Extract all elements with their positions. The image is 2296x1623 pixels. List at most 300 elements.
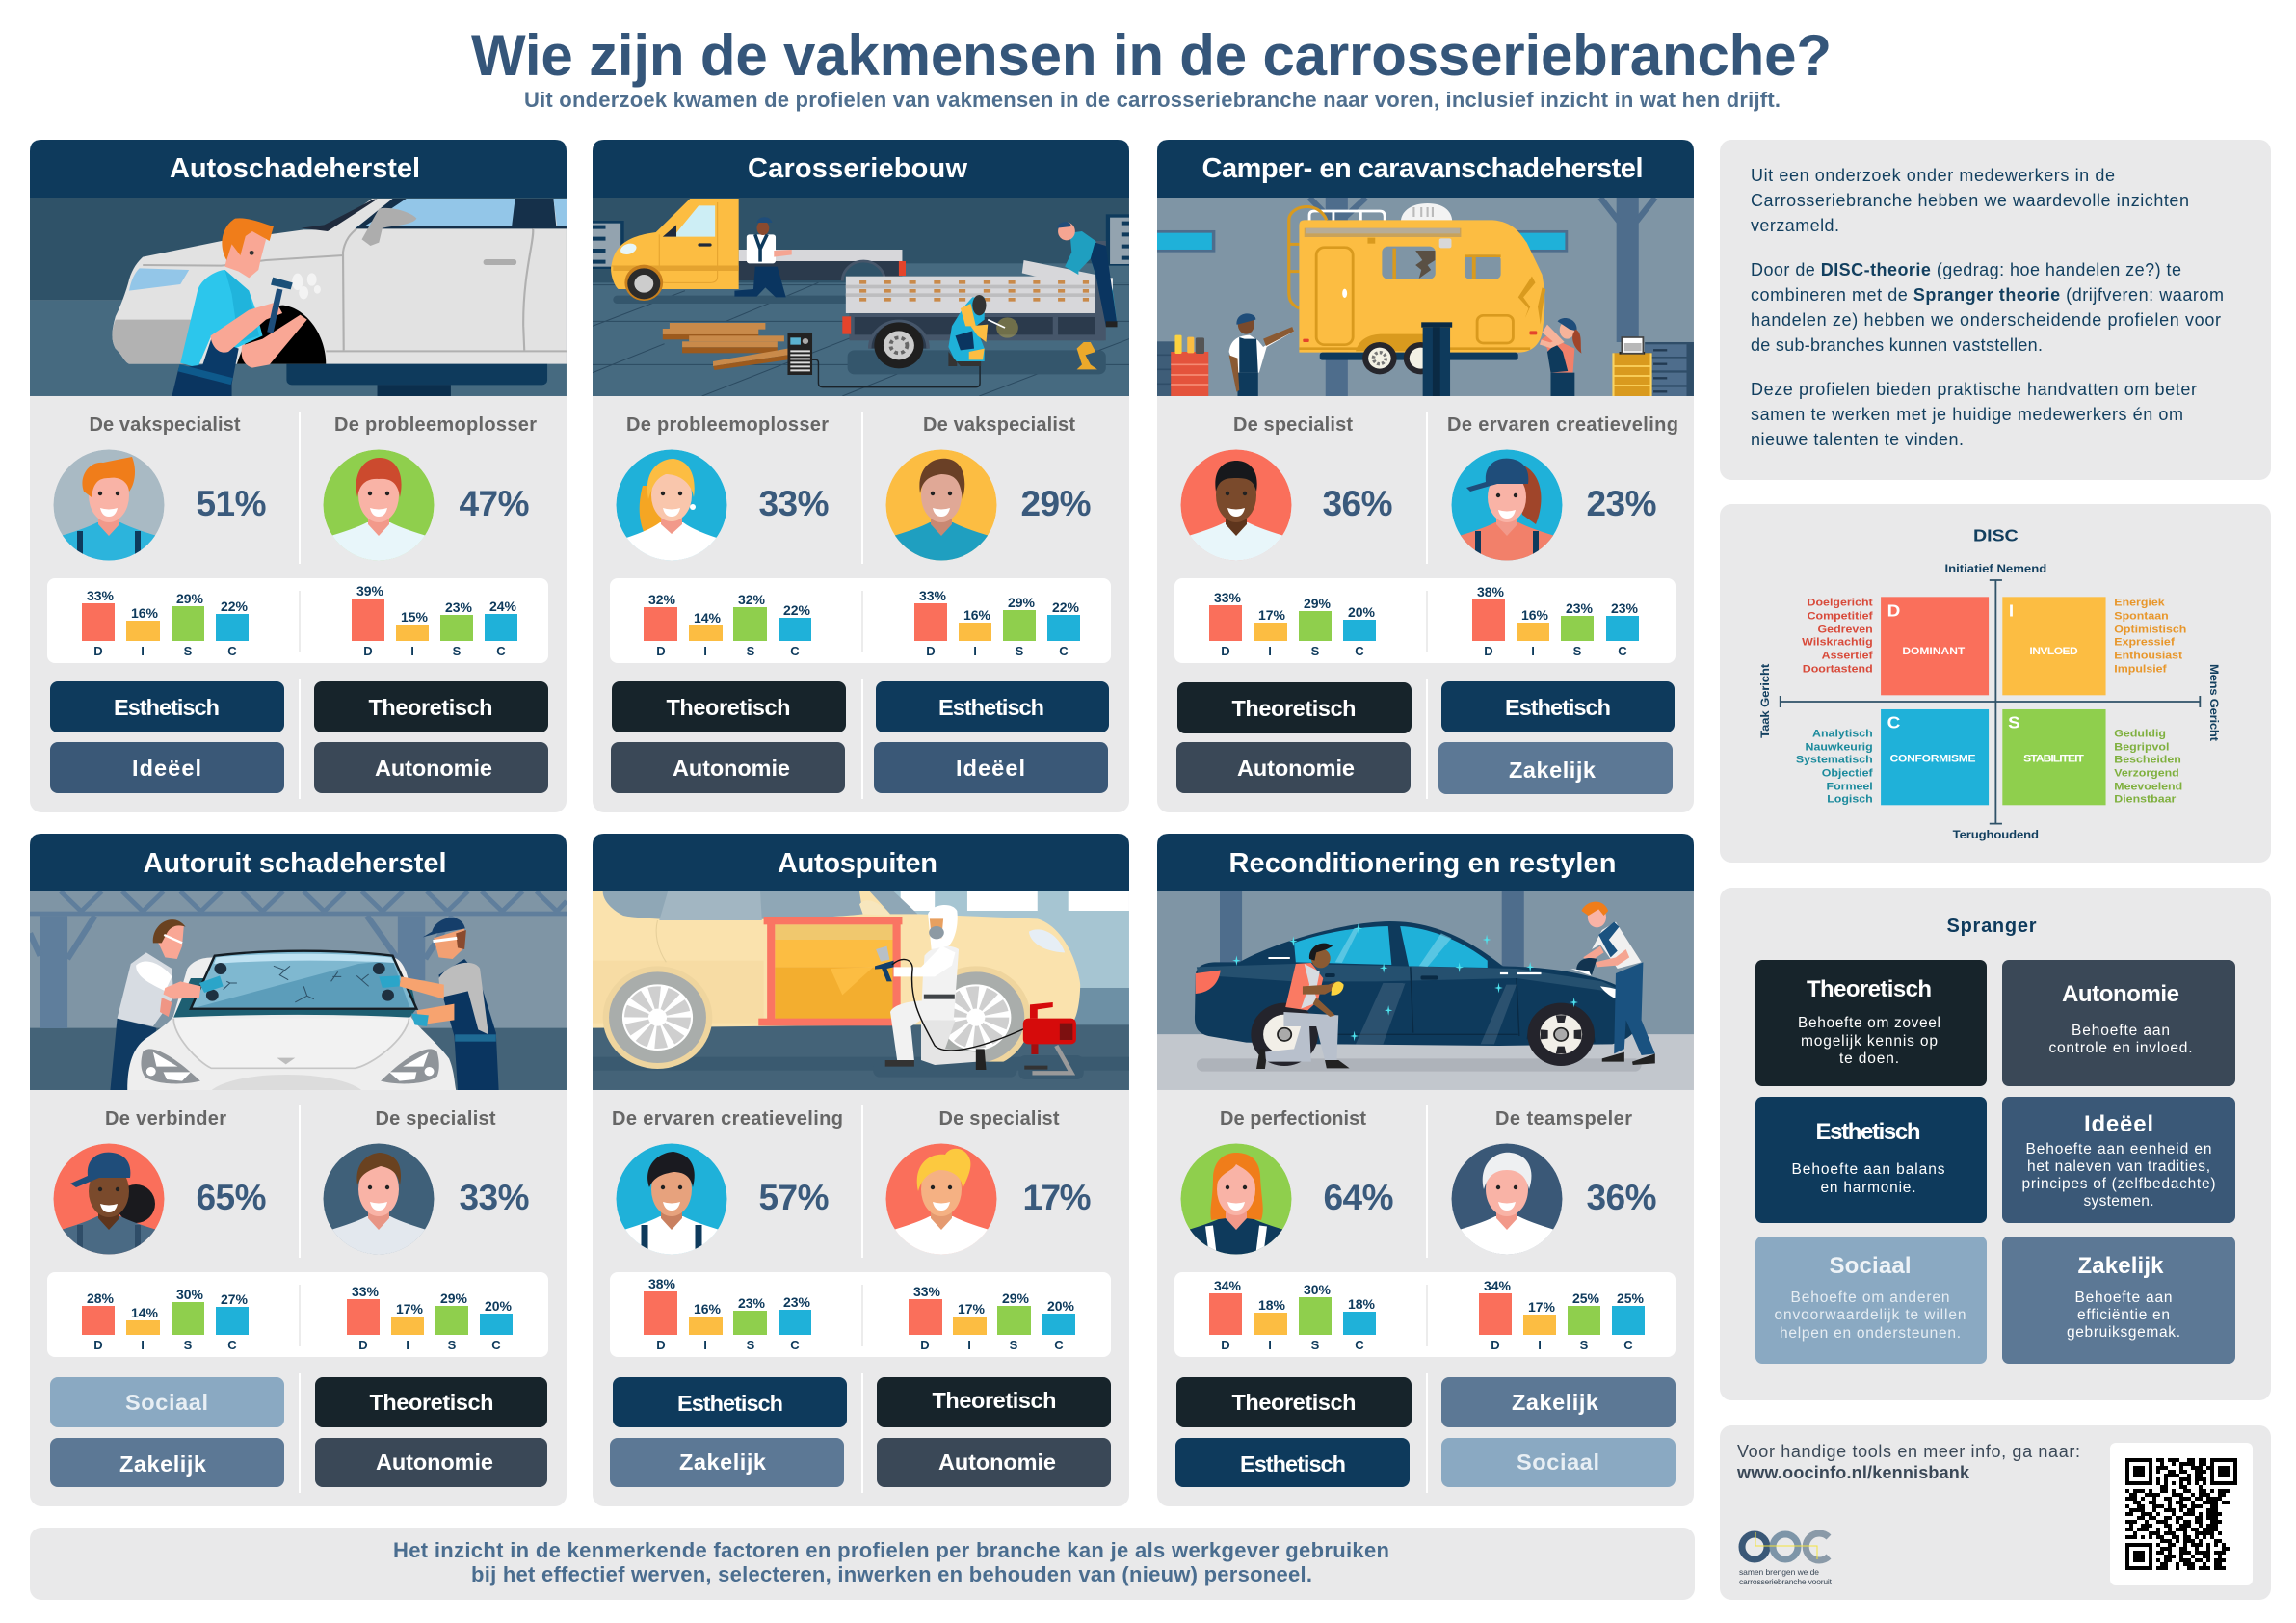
DISC bar chart card: 22% bbox=[783, 602, 811, 618]
percentage: 23% bbox=[1586, 484, 1657, 523]
DISC bar chart card: 22% bbox=[221, 599, 249, 614]
quadrant I: INVLOED bbox=[2029, 646, 2078, 657]
tile: Esthetisch: Behoefte aan balans bbox=[1792, 1161, 1945, 1178]
D traits: Wilskrachtig bbox=[1802, 635, 1873, 649]
C traits: Objectief bbox=[1822, 766, 1873, 779]
quadrant I: I bbox=[2009, 601, 2014, 620]
DISC bar chart card: 38% bbox=[648, 1276, 676, 1291]
quadrant C bbox=[1881, 709, 1989, 805]
panel: Autoschadeherstel bbox=[30, 140, 567, 812]
DISC bar chart card: C bbox=[227, 644, 237, 658]
driver pills: Theoretisch bbox=[1231, 1390, 1357, 1415]
driver pills: Autonomie bbox=[673, 756, 790, 781]
DISC bar chart card: 23% bbox=[783, 1294, 811, 1310]
DISC bar chart card: 34% bbox=[1214, 1278, 1242, 1293]
driver pills: Esthetisch bbox=[1240, 1451, 1346, 1477]
DISC bar chart card: 33% bbox=[913, 1284, 941, 1299]
percentage: 64% bbox=[1324, 1178, 1393, 1217]
DISC bar chart card: I bbox=[141, 1338, 145, 1352]
DISC bar chart card: 39% bbox=[356, 583, 384, 599]
avatar: De ervaren creatieveling bbox=[614, 1143, 729, 1257]
axis labels: Mens Gericht bbox=[2207, 664, 2220, 742]
C traits: Nauwkeurig bbox=[1806, 740, 1873, 754]
avatar: De specialist bbox=[884, 1143, 999, 1257]
driver pills: Esthetisch bbox=[114, 695, 220, 720]
C traits: Systematisch bbox=[1796, 753, 1873, 766]
profile name: De ervaren creatieveling bbox=[612, 1108, 843, 1130]
DISC bar chart card: 14% bbox=[131, 1305, 159, 1320]
driver pills: Theoretisch bbox=[667, 695, 790, 720]
DISC bar chart card: C bbox=[1054, 1338, 1064, 1352]
QR code bbox=[2110, 1443, 2253, 1585]
percentage: 33% bbox=[459, 1178, 530, 1217]
illustration: car detailing bbox=[1157, 891, 1694, 1090]
tile: Theoretisch: Behoefte om zoveel bbox=[1798, 1015, 1940, 1031]
DISC bar chart card: 17% bbox=[958, 1301, 986, 1317]
DISC bar chart card: 16% bbox=[1521, 607, 1549, 623]
column: De vakspecialist bbox=[51, 414, 266, 563]
panel: introduction text: Door de DISC-theorie (gedrag: hoe handelen ze?) te bbox=[1751, 260, 2181, 279]
DISC bar chart card: 20% bbox=[485, 1298, 513, 1314]
S traits: Geduldig bbox=[2114, 727, 2166, 740]
panel: links and logo bbox=[1720, 1425, 2271, 1600]
tile: Ideëel: systemen. bbox=[2083, 1193, 2154, 1210]
logo: OOC: carrosseriebranche vooruit bbox=[1739, 1577, 1833, 1586]
DISC bar chart card: I bbox=[703, 644, 707, 658]
DISC bar chart card: 16% bbox=[131, 605, 159, 621]
illustration: car spray painting bbox=[593, 891, 1129, 1090]
DISC bar chart card: 33% bbox=[352, 1284, 380, 1299]
driver pills: Theoretisch bbox=[1231, 696, 1357, 721]
DISC bar chart card: D bbox=[1221, 1338, 1230, 1352]
S traits: Bescheiden bbox=[2114, 753, 2181, 766]
tile: Autonomie: Autonomie bbox=[2062, 981, 2179, 1007]
DISC bar chart card: 17% bbox=[1258, 607, 1286, 623]
panel: Spranger bbox=[1720, 888, 2271, 1400]
DISC bar chart card: D bbox=[656, 1338, 666, 1352]
quadrant D: D bbox=[1887, 601, 1900, 620]
DISC bar chart card: C bbox=[491, 1338, 501, 1352]
DISC bar chart card: 18% bbox=[1348, 1296, 1376, 1312]
DISC bar chart card: D bbox=[920, 1338, 930, 1352]
logo: OOC: samen brengen we de bbox=[1739, 1567, 1819, 1577]
panel: introduction text: Uit een onderzoek onder medewerkers in de bbox=[1751, 166, 2115, 185]
column: De ervaren creatieveling bbox=[1447, 414, 1678, 563]
DISC bar chart card: C bbox=[1618, 644, 1627, 658]
DISC bar chart card: 25% bbox=[1617, 1290, 1645, 1306]
profile name: De specialist bbox=[1233, 414, 1353, 436]
tile: Esthetisch bbox=[1755, 1097, 1987, 1223]
percentage: 29% bbox=[1021, 484, 1091, 523]
driver pills: Autonomie bbox=[375, 756, 492, 781]
DISC bar chart card: S bbox=[453, 644, 462, 658]
DISC bar chart card: S bbox=[1580, 1338, 1589, 1352]
quadrant C: C bbox=[1887, 713, 1900, 732]
tile: Sociaal: Behoefte om anderen bbox=[1790, 1290, 1950, 1306]
tile: Sociaal: helpen en ondersteunen. bbox=[1780, 1325, 1961, 1342]
S traits: Verzorgend bbox=[2114, 766, 2179, 779]
DISC bar chart card: 33% bbox=[87, 588, 115, 603]
DISC bar chart card: 23% bbox=[1611, 600, 1639, 616]
DISC bar chart card: 29% bbox=[1304, 596, 1332, 611]
DISC bar chart card: I bbox=[141, 644, 145, 658]
DISC bar chart card: 23% bbox=[445, 599, 473, 615]
axes bbox=[1781, 580, 2200, 824]
DISC bar chart card: C bbox=[1355, 1338, 1364, 1352]
DISC bar chart card bbox=[47, 578, 548, 663]
DISC bar chart card: D bbox=[358, 1338, 368, 1352]
panel: Camper- en caravanschadeherstel bbox=[1157, 140, 1694, 812]
profile name: De ervaren creatieveling bbox=[1447, 414, 1678, 436]
heading: Autoschadeherstel bbox=[170, 153, 420, 184]
I traits: Spontaan bbox=[2114, 609, 2169, 622]
DISC bar chart card: 30% bbox=[1304, 1282, 1332, 1297]
DISC bar chart card: 16% bbox=[694, 1301, 722, 1317]
profile name: De verbinder bbox=[105, 1108, 226, 1130]
panel: introduction text: combineren met de Spranger theorie (drijfveren: waarom bbox=[1751, 285, 2224, 305]
tile: Autonomie bbox=[2002, 960, 2235, 1086]
avatar: De verbinder bbox=[51, 1143, 167, 1257]
heading: Reconditionering en restylen bbox=[1229, 848, 1617, 879]
DISC bar chart card: I bbox=[1268, 1338, 1272, 1352]
DISC bar chart card bbox=[610, 1272, 1111, 1357]
DISC bar chart card: 25% bbox=[1572, 1290, 1600, 1306]
D traits: Doortastend bbox=[1803, 662, 1873, 676]
driver pills bbox=[1176, 681, 1675, 794]
tile: Zakelijk: Behoefte aan bbox=[2075, 1290, 2172, 1306]
quadrant S bbox=[2002, 709, 2106, 805]
axis labels: Taak Gericht bbox=[1759, 663, 1772, 738]
illustration: truck bed building bbox=[593, 198, 1129, 396]
tile: Ideëel: het naleven van tradities, bbox=[2027, 1158, 2210, 1175]
profile name: De probleemoplosser bbox=[334, 414, 537, 436]
DISC bar chart card: S bbox=[1016, 644, 1024, 658]
S traits: Dienstbaar bbox=[2114, 792, 2177, 805]
driver pills: Ideëel bbox=[956, 756, 1025, 781]
DISC bar chart card: 22% bbox=[1052, 599, 1080, 615]
logo: OOC bbox=[1739, 1532, 1833, 1586]
panel: Reconditionering en restylen bbox=[1157, 834, 1694, 1506]
DISC bar chart card: 23% bbox=[1566, 600, 1594, 616]
tile: Sociaal: Sociaal bbox=[1829, 1253, 1912, 1279]
DISC bar chart card: S bbox=[184, 644, 193, 658]
panel: introduction text: nieuwe talenten te vinden. bbox=[1751, 430, 1964, 449]
DISC bar chart card: I bbox=[406, 1338, 409, 1352]
subtitle: Uit onderzoek kwamen de profielen van vakmensen in de carrosseriebranche naar voren, inclusief inzicht in wat hen drijft. bbox=[524, 88, 1781, 112]
driver pills: Theoretisch bbox=[368, 695, 493, 720]
driver pills: Zakelijk bbox=[1512, 1390, 1599, 1415]
quadrant D: DOMINANT bbox=[1902, 646, 1965, 657]
DISC bar chart card: 29% bbox=[1008, 595, 1036, 610]
percentage: 17% bbox=[1023, 1178, 1091, 1217]
D traits: Doelgericht bbox=[1808, 596, 1873, 608]
D traits: Assertief bbox=[1822, 649, 1873, 662]
driver pills: Esthetisch bbox=[938, 695, 1044, 720]
DISC bar chart card: S bbox=[1010, 1338, 1018, 1352]
column: De specialist bbox=[1178, 414, 1393, 563]
DISC bar chart card: I bbox=[1538, 1338, 1542, 1352]
percentage: 57% bbox=[759, 1178, 829, 1217]
DISC bar chart card: D bbox=[93, 1338, 103, 1352]
tile: Ideëel: Behoefte aan eenheid en bbox=[2025, 1141, 2212, 1157]
profile name: De probleemoplosser bbox=[626, 414, 829, 436]
DISC bar chart card bbox=[47, 1272, 548, 1357]
DISC bar chart card: 24% bbox=[489, 599, 517, 614]
DISC bar chart card: C bbox=[790, 1338, 800, 1352]
percentage: 36% bbox=[1586, 1178, 1657, 1217]
illustration: car body repair bbox=[30, 198, 567, 396]
profile name: De vakspecialist bbox=[923, 414, 1075, 436]
DISC bar chart card: C bbox=[1059, 644, 1069, 658]
illustration: windscreen replacement bbox=[30, 891, 567, 1090]
profile name: De specialist bbox=[938, 1108, 1060, 1130]
C traits: Logisch bbox=[1827, 792, 1873, 805]
DISC bar chart card: C bbox=[227, 1338, 237, 1352]
tile: Theoretisch: Theoretisch bbox=[1807, 976, 1932, 1002]
DISC bar chart card: 20% bbox=[1047, 1298, 1075, 1314]
panel: closing statement: Het inzicht in de kenmerkende factoren en profielen per branche kan je als werkgever gebruiken bbox=[393, 1538, 1389, 1562]
column: De probleemoplosser bbox=[614, 414, 829, 563]
panel: introduction text: Carrosseriebranche hebben we waardevolle inzichten bbox=[1751, 191, 2189, 210]
heading: Carosseriebouw bbox=[748, 153, 967, 184]
avatar: De vakspecialist bbox=[884, 449, 999, 563]
DISC bar chart card: 29% bbox=[176, 591, 204, 606]
DISC bar chart card: 38% bbox=[1477, 584, 1505, 599]
driver pills bbox=[1175, 1377, 1676, 1487]
panel: introduction text: verzameld. bbox=[1751, 216, 1839, 235]
DISC bar chart card: D bbox=[363, 644, 373, 658]
heading: Autoruit schadeherstel bbox=[143, 848, 447, 879]
DISC bar chart card: S bbox=[1311, 1338, 1320, 1352]
DISC bar chart card bbox=[1174, 578, 1676, 663]
DISC bar chart card: D bbox=[1491, 1338, 1500, 1352]
DISC bar chart card: C bbox=[790, 644, 800, 658]
driver pills: Sociaal bbox=[125, 1390, 208, 1415]
I traits: Optimistisch bbox=[2114, 623, 2186, 635]
DISC bar chart card: 20% bbox=[1348, 604, 1376, 620]
driver pills: Ideëel bbox=[132, 756, 201, 781]
DISC bar chart card: D bbox=[93, 644, 103, 658]
column: De teamspeler bbox=[1449, 1108, 1657, 1257]
DISC bar chart card: 14% bbox=[694, 610, 722, 625]
percentage: 65% bbox=[197, 1178, 266, 1217]
DISC bar chart card: I bbox=[703, 1338, 707, 1352]
DISC bar chart card: 32% bbox=[738, 592, 766, 607]
tile: Ideëel: principes of (zelfbedachte) bbox=[2021, 1176, 2216, 1192]
tile: Esthetisch: en harmonie. bbox=[1821, 1180, 1915, 1196]
tile: Ideëel: Ideëel bbox=[2084, 1111, 2153, 1137]
illustration: caravan repair bbox=[1157, 198, 1694, 396]
tile: Zakelijk: gebruiksgemak. bbox=[2067, 1324, 2180, 1341]
S traits bbox=[2114, 727, 2182, 805]
driver pills: Autonomie bbox=[376, 1450, 493, 1475]
driver pills: Theoretisch bbox=[370, 1390, 493, 1415]
DISC bar chart card: 33% bbox=[919, 588, 947, 603]
tile: Zakelijk bbox=[2002, 1237, 2235, 1364]
panel: closing statement: bij het effectief werven, selecteren, inwerken en behouden van (nieuw) personeel. bbox=[471, 1562, 1312, 1586]
profile name: De specialist bbox=[376, 1108, 496, 1130]
avatar: De specialist bbox=[1178, 449, 1294, 563]
tile: Esthetisch: Esthetisch bbox=[1815, 1119, 1921, 1145]
DISC bar chart card: 33% bbox=[1214, 590, 1242, 605]
DISC bar chart card bbox=[610, 578, 1111, 663]
DISC bar chart card bbox=[1174, 1272, 1676, 1357]
panel: introduction text: Deze profielen bieden praktische handvatten om beter bbox=[1751, 380, 2197, 399]
DISC bar chart card: I bbox=[1268, 644, 1272, 658]
DISC bar chart card: S bbox=[747, 644, 755, 658]
column: De verbinder bbox=[51, 1108, 266, 1257]
Spranger heading: Spranger bbox=[1946, 916, 2037, 937]
column: De specialist bbox=[884, 1108, 1091, 1257]
tile: Theoretisch bbox=[1755, 960, 1987, 1086]
DISC bar chart card: 32% bbox=[648, 592, 676, 607]
tile: Theoretisch: mogelijk kennis op bbox=[1801, 1033, 1938, 1050]
link url: www.oocinfo.nl/kennisbank bbox=[1736, 1463, 1970, 1482]
quadrant I bbox=[2002, 597, 2106, 695]
avatar: De probleemoplosser bbox=[614, 449, 729, 563]
driver pills bbox=[50, 681, 548, 793]
I traits bbox=[2114, 596, 2186, 676]
DISC bar chart card: C bbox=[1355, 644, 1364, 658]
driver pills: Autonomie bbox=[1237, 756, 1355, 781]
panel: introduction text: samen te werken met je huidige medewerkers én om bbox=[1751, 405, 2183, 424]
axis labels: Initiatief Nemend bbox=[1944, 562, 2046, 575]
link text: Voor handige tools en meer info, ga naar: bbox=[1737, 1442, 2080, 1461]
DISC bar chart card: I bbox=[973, 644, 977, 658]
percentage: 33% bbox=[759, 484, 829, 523]
profile name: De vakspecialist bbox=[89, 414, 241, 436]
profile name: De perfectionist bbox=[1220, 1108, 1366, 1130]
tile: Sociaal: onvoorwaardelijk te willen bbox=[1775, 1307, 1966, 1323]
column: De probleemoplosser bbox=[321, 414, 537, 563]
quadrant S: S bbox=[2008, 713, 2020, 732]
DISC bar chart card: 34% bbox=[1484, 1278, 1512, 1293]
driver pills: Zakelijk bbox=[1509, 758, 1597, 783]
panel: introduction text: handelen ze) hebben we onderscheidende profielen voor bbox=[1751, 310, 2221, 330]
panel: Autoruit schadeherstel bbox=[30, 834, 567, 1506]
DISC bar chart card: 27% bbox=[221, 1291, 249, 1307]
I traits: Enthousiast bbox=[2114, 649, 2182, 662]
DISC bar chart card: D bbox=[926, 644, 936, 658]
D traits bbox=[1802, 596, 1873, 676]
DISC bar chart card: 28% bbox=[87, 1290, 115, 1306]
driver pills: Esthetisch bbox=[1505, 695, 1611, 720]
tile: Zakelijk: efficiëntie en bbox=[2077, 1307, 2170, 1323]
driver pills: Sociaal bbox=[1517, 1450, 1599, 1475]
DISC bar chart card: C bbox=[1623, 1338, 1633, 1352]
panel: Autospuiten bbox=[593, 834, 1129, 1506]
quadrant C: CONFORMISME bbox=[1890, 754, 1976, 765]
DISC bar chart card: S bbox=[448, 1338, 457, 1352]
driver pills: Zakelijk bbox=[679, 1450, 767, 1475]
DISC heading: DISC bbox=[1973, 525, 2019, 545]
I traits: Expressief bbox=[2114, 635, 2175, 649]
avatar: De vakspecialist bbox=[51, 449, 167, 563]
panel: DISC model bbox=[1720, 504, 2271, 863]
driver pills: Theoretisch bbox=[933, 1388, 1056, 1413]
driver pills bbox=[50, 1377, 547, 1487]
avatar: De specialist bbox=[321, 1143, 436, 1257]
avatar: De teamspeler bbox=[1449, 1143, 1565, 1257]
percentage: 51% bbox=[197, 484, 266, 523]
panel: Carosseriebouw bbox=[593, 140, 1129, 812]
DISC bar chart card: S bbox=[184, 1338, 193, 1352]
tile: Theoretisch: te doen. bbox=[1839, 1051, 1899, 1067]
profile name: De teamspeler bbox=[1495, 1108, 1632, 1130]
DISC bar chart card: I bbox=[967, 1338, 971, 1352]
DISC bar chart card: S bbox=[747, 1338, 755, 1352]
C traits: Formeel bbox=[1827, 780, 1873, 792]
avatar: De perfectionist bbox=[1178, 1143, 1294, 1257]
DISC bar chart card: D bbox=[656, 644, 666, 658]
column: De ervaren creatieveling bbox=[612, 1108, 843, 1257]
avatar: De ervaren creatieveling bbox=[1449, 449, 1565, 563]
quadrant S: STABILITEIT bbox=[2023, 754, 2084, 765]
driver pills: Autonomie bbox=[938, 1450, 1056, 1475]
DISC bar chart card: S bbox=[1573, 644, 1582, 658]
DISC bar chart card: I bbox=[1531, 644, 1535, 658]
C traits: Analytisch bbox=[1812, 727, 1873, 740]
driver pills bbox=[611, 681, 1109, 793]
DISC bar chart card: 29% bbox=[1002, 1290, 1030, 1306]
DISC bar chart card: 23% bbox=[738, 1295, 766, 1311]
axis labels: Terughoudend bbox=[1953, 828, 2039, 841]
D traits: Gedreven bbox=[1818, 623, 1873, 635]
D traits: Competitief bbox=[1808, 609, 1873, 622]
DISC bar chart card: 15% bbox=[401, 609, 429, 625]
driver pills bbox=[610, 1377, 1111, 1487]
avatar: De probleemoplosser bbox=[321, 449, 436, 563]
DISC bar chart card: 18% bbox=[1258, 1297, 1286, 1313]
heading: Autospuiten bbox=[778, 848, 937, 879]
tile: Ideëel bbox=[2002, 1097, 2235, 1223]
DISC bar chart card: I bbox=[410, 644, 414, 658]
column: De perfectionist bbox=[1178, 1108, 1393, 1257]
tile: Sociaal bbox=[1755, 1237, 1987, 1364]
panel: introduction text bbox=[1720, 140, 2271, 480]
tile: Zakelijk: Zakelijk bbox=[2077, 1253, 2164, 1279]
DISC bar chart card: D bbox=[1221, 644, 1230, 658]
DISC bar chart card: C bbox=[496, 644, 506, 658]
column: De vakspecialist bbox=[884, 414, 1091, 563]
column: De specialist bbox=[321, 1108, 530, 1257]
driver pills: Zakelijk bbox=[119, 1451, 207, 1477]
tile: Autonomie: controle en invloed. bbox=[2048, 1040, 2193, 1056]
S traits: Meevoelend bbox=[2114, 780, 2182, 792]
quadrant D bbox=[1881, 597, 1989, 695]
percentage: 47% bbox=[459, 484, 530, 523]
tile: Autonomie: Behoefte aan bbox=[2072, 1023, 2170, 1039]
panel: closing statement bbox=[30, 1528, 1695, 1600]
I traits: Impulsief bbox=[2114, 662, 2167, 676]
I traits: Energiek bbox=[2114, 596, 2165, 608]
DISC bar chart card: D bbox=[1484, 644, 1493, 658]
panel: introduction text: de sub-branches kunnen vaststellen. bbox=[1751, 335, 2043, 355]
DISC bar chart card: 29% bbox=[440, 1290, 468, 1306]
DISC bar chart card: 17% bbox=[396, 1301, 424, 1317]
DISC bar chart card: 16% bbox=[963, 607, 991, 623]
title: Wie zijn de vakmensen in de carrosseriebranche? bbox=[471, 23, 1832, 88]
C traits bbox=[1796, 727, 1873, 805]
DISC bar chart card: S bbox=[1311, 644, 1320, 658]
DISC bar chart card: 30% bbox=[176, 1287, 204, 1302]
driver pills: Esthetisch bbox=[677, 1391, 783, 1416]
heading: Camper- en caravanschadeherstel bbox=[1202, 153, 1644, 184]
S traits: Begripvol bbox=[2114, 740, 2169, 754]
percentage: 36% bbox=[1322, 484, 1393, 523]
axis labels bbox=[1759, 562, 2220, 841]
DISC bar chart card: 17% bbox=[1528, 1299, 1556, 1315]
